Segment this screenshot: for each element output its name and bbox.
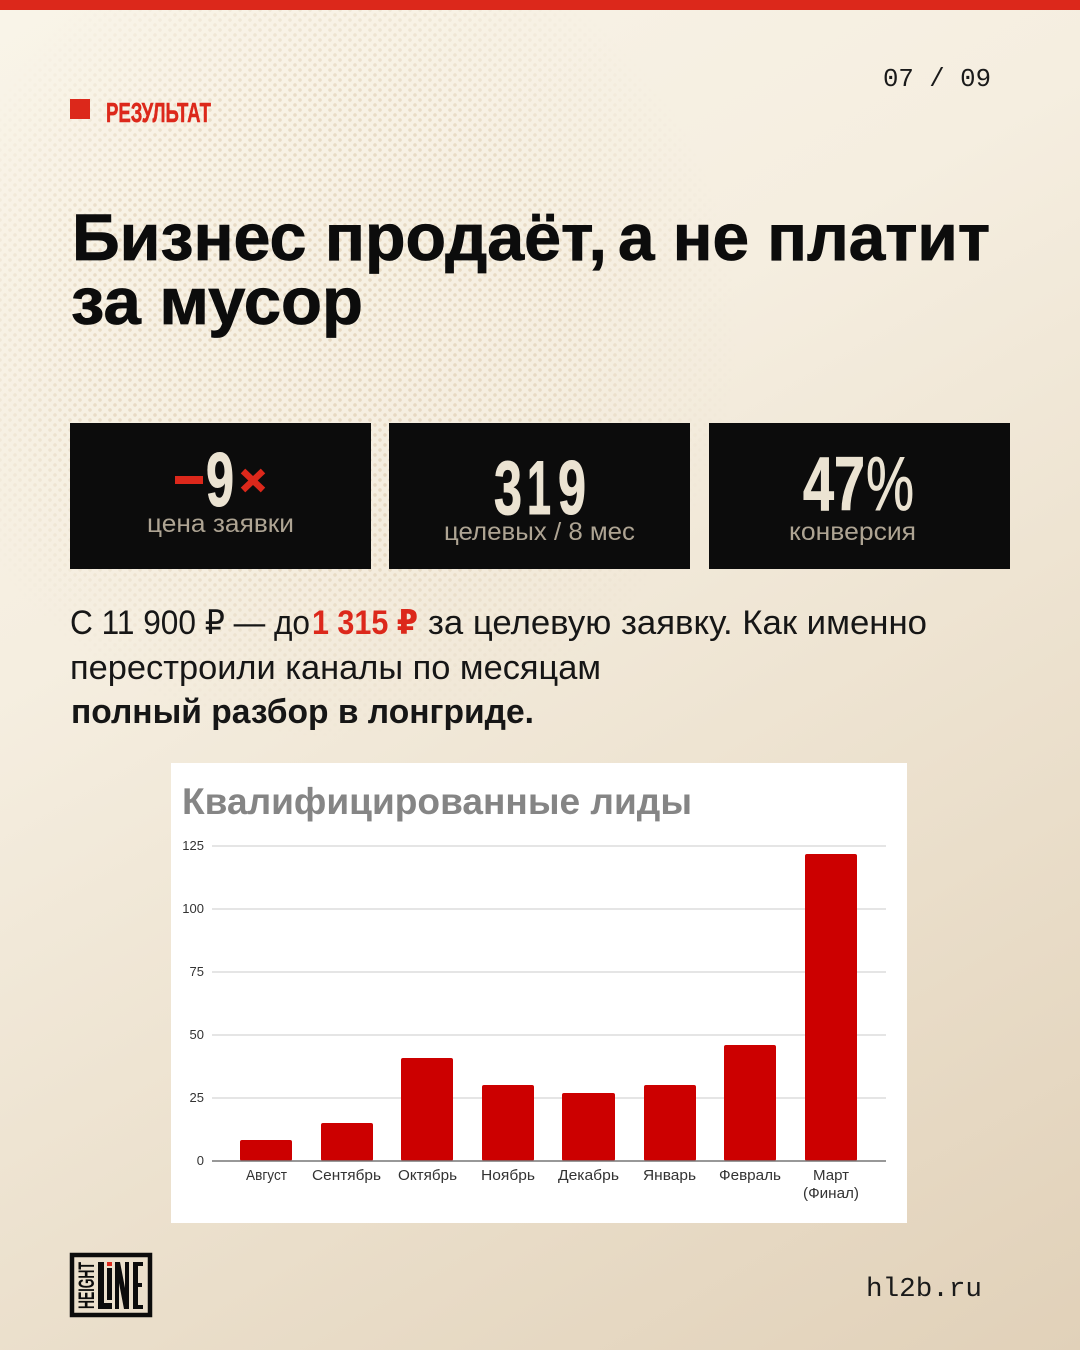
y axis labels: 50	[190, 1027, 204, 1042]
x axis labels: Ноябрь	[481, 1167, 535, 1184]
title: а не платит	[618, 200, 990, 274]
y axis labels: 75	[190, 964, 204, 979]
x axis labels	[246, 1167, 859, 1202]
x axis labels: Октябрь	[398, 1167, 457, 1184]
title: за мусор	[71, 264, 363, 338]
stat card: cost per lead	[70, 423, 371, 569]
y axis labels: 0	[197, 1153, 204, 1168]
x axis labels: Март	[813, 1167, 849, 1184]
y axis labels: 25	[190, 1090, 204, 1105]
top red bar	[0, 0, 1080, 10]
title	[71, 200, 990, 338]
bars	[240, 854, 857, 1161]
x axis labels: Сентябрь	[312, 1167, 381, 1184]
page counter: 07 / 09	[883, 64, 991, 94]
stat card: conversion: конверсия	[789, 518, 916, 546]
body text	[70, 604, 927, 731]
body text: перестроили каналы по месяцам	[70, 649, 601, 687]
x axis labels: (Финал)	[803, 1185, 859, 1202]
chart title: Квалифицированные лиды	[182, 781, 692, 822]
stat card: cost per lead: 9	[206, 438, 234, 523]
body text: С 11 900 ₽ — до	[70, 604, 310, 642]
y axis labels: 100	[182, 901, 204, 916]
stat card: qualified leads: целевых / 8 мес	[444, 518, 635, 546]
stat card: conversion	[709, 423, 1010, 569]
website url: hl2b.ru	[866, 1275, 982, 1305]
logo: Height Line: HEIGHT	[74, 1262, 99, 1309]
y axis labels: 125	[182, 838, 204, 853]
stat card: qualified leads: 1	[527, 446, 551, 531]
y axis labels	[182, 838, 204, 1168]
section label: result	[70, 97, 211, 128]
stat card: qualified leads	[389, 423, 690, 569]
stat card: conversion: 47	[803, 442, 865, 527]
stat card: qualified leads: 9	[558, 446, 586, 531]
stat card: qualified leads: 3	[494, 446, 522, 531]
bar chart: qualified leads	[171, 763, 907, 1223]
logo: Height Line	[72, 1255, 150, 1315]
x axis labels: Январь	[643, 1167, 696, 1184]
body text: 1 315 ₽	[312, 604, 418, 642]
title: Бизнес продаёт,	[72, 200, 607, 274]
stat card: cost per lead: цена заявки	[147, 510, 294, 538]
body text: полный разбор в лонгриде.	[71, 693, 534, 731]
section label: result: РЕЗУЛЬТАТ	[106, 97, 211, 128]
x axis labels: Февраль	[719, 1167, 781, 1184]
body text: за целевую заявку. Как именно	[428, 604, 927, 642]
x axis labels: Август	[246, 1167, 287, 1184]
stat card: conversion: %	[866, 442, 914, 527]
x axis labels: Декабрь	[558, 1167, 619, 1184]
